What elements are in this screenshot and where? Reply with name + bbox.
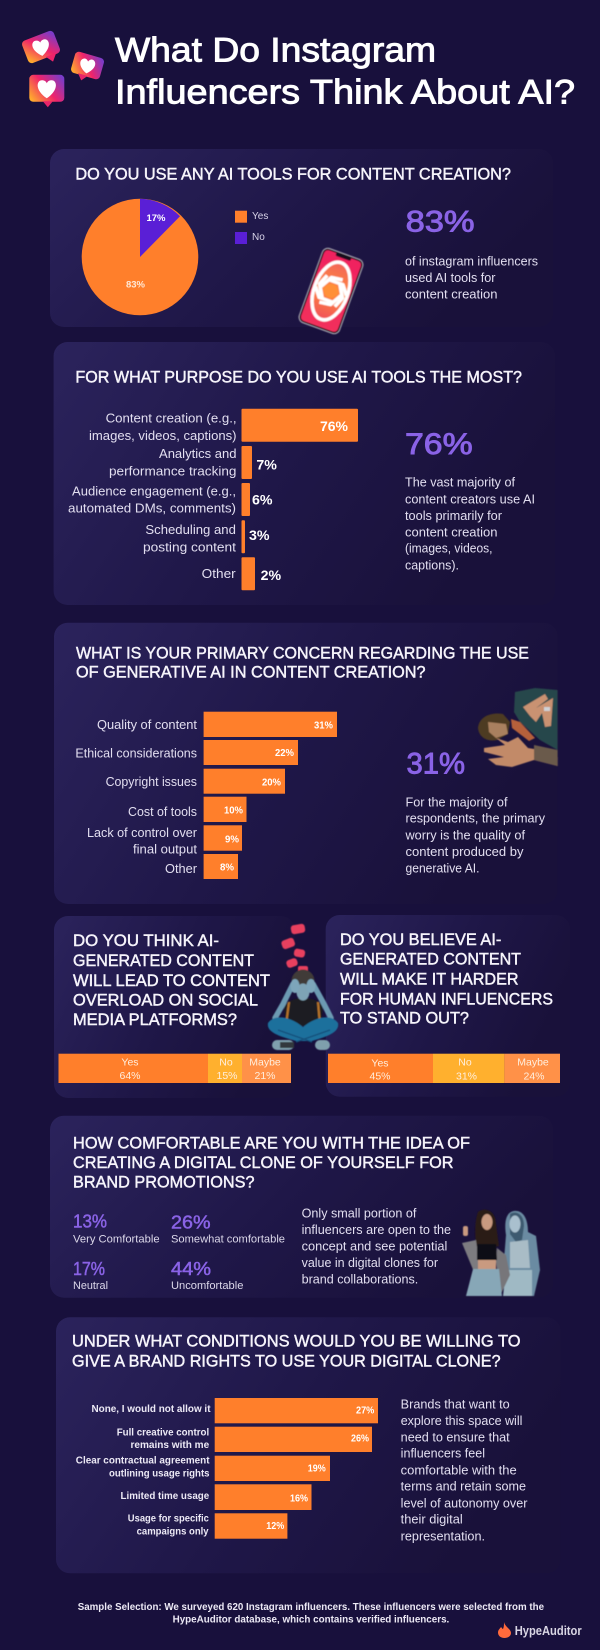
bar chart — [75, 712, 337, 879]
bar chart: Analytics and — [159, 446, 236, 461]
legend: No — [252, 232, 265, 243]
stacked bar: 64% — [119, 1070, 141, 1082]
description: representation. — [401, 1529, 485, 1543]
bar chart: 26% — [351, 1433, 369, 1444]
panel background — [326, 915, 570, 1097]
title: What Do Instagram — [115, 32, 436, 70]
description: tools primarily for — [405, 509, 502, 523]
bar chart: 10% — [224, 806, 243, 817]
heading: FOR HUMAN INFLUENCERS — [340, 990, 553, 1008]
bar chart — [68, 409, 358, 590]
description: generative AI. — [406, 861, 480, 875]
description: worry is the quality of — [404, 828, 526, 842]
icon: heart bubble right — [69, 51, 105, 85]
heading: FOR WHAT PURPOSE DO YOU USE AI TOOLS THE MOST? — [75, 369, 522, 387]
description: content creation — [405, 525, 498, 539]
stacked bar: 31% — [456, 1070, 477, 1082]
stat: uncomfortable: Uncomfortable — [171, 1280, 243, 1292]
panel: conditions for digital clone rights — [56, 1317, 561, 1573]
bar chart: Cost of tools — [128, 804, 197, 819]
panel background — [50, 1116, 553, 1298]
bar chart: automated DMs, comments) — [68, 501, 236, 516]
panel: purpose of AI tools — [54, 342, 555, 605]
stacked bar: 24% — [523, 1070, 545, 1082]
description: content creators use AI — [405, 492, 535, 506]
heading: BRAND PROMOTIONS? — [73, 1173, 254, 1191]
stat: neutral: 17% — [73, 1258, 105, 1279]
stat: very comfortable: 13% — [73, 1210, 107, 1231]
heading: OF GENERATIVE AI IN CONTENT CREATION? — [76, 664, 426, 682]
icon: phone with AI logo — [297, 247, 365, 335]
description: value in digital clones for — [302, 1256, 438, 1270]
bar chart: performance tracking — [109, 464, 236, 479]
heading: OVERLOAD ON SOCIAL — [73, 992, 258, 1010]
legend: Yes — [252, 211, 268, 222]
bar chart: 6% — [252, 492, 273, 508]
bar chart: remains with me — [130, 1439, 209, 1451]
heading: GIVE A BRAND RIGHTS TO USE YOUR DIGITAL CLONE? — [72, 1353, 501, 1371]
footnote: sample selection: HypeAuditor database, which contains verified influencers. — [173, 1614, 449, 1626]
bar chart: Other — [202, 566, 236, 581]
bar chart — [76, 1398, 378, 1539]
bar chart: None, I would not allow it — [92, 1403, 211, 1415]
key stat: 76% — [405, 428, 473, 461]
description: explore this space will — [401, 1414, 522, 1428]
heading: TO STAND OUT? — [340, 1010, 469, 1028]
bar chart: Audience engagement (e.g., — [72, 484, 236, 499]
bar chart: 22% — [275, 748, 294, 759]
description: Brands that want to — [401, 1397, 510, 1411]
heading: HOW COMFORTABLE ARE YOU WITH THE IDEA OF — [73, 1134, 470, 1152]
panel background — [54, 342, 555, 605]
pie chart: 83% — [126, 280, 146, 290]
bar chart: 31% — [314, 720, 333, 731]
stacked bar: Maybe — [249, 1057, 281, 1069]
heading: MEDIA PLATFORMS? — [73, 1011, 237, 1029]
panel background — [50, 149, 553, 327]
stat: uncomfortable — [171, 1258, 243, 1292]
stat: very comfortable — [73, 1210, 160, 1246]
description: (images, videos, — [405, 542, 492, 556]
pie chart: 17% — [146, 213, 166, 224]
bar chart: Limited time usage — [120, 1490, 209, 1502]
key stat: 31% — [406, 747, 465, 780]
bar chart: 9% — [225, 835, 239, 846]
bar chart: 16% — [290, 1493, 308, 1504]
icon: heart notification bubbles — [21, 30, 105, 107]
description: level of autonomy over — [401, 1496, 527, 1510]
image: man with hands — [478, 688, 558, 767]
description: Only small portion of — [302, 1207, 417, 1221]
bar chart: Usage for specific — [128, 1513, 209, 1525]
stat: somewhat comfortable — [171, 1211, 285, 1246]
description: terms and retain some — [401, 1480, 526, 1494]
key stat: 83% — [406, 206, 475, 239]
description: concept and see potential — [302, 1240, 447, 1254]
bar chart: Scheduling and — [145, 522, 236, 537]
stacked bar — [328, 1054, 560, 1083]
bar chart: Lack of control over — [87, 825, 198, 840]
bar chart: 8% — [220, 863, 234, 874]
heading: GENERATED CONTENT — [340, 951, 521, 969]
bar chart: Quality of content — [97, 717, 197, 732]
heading: DO YOU USE ANY AI TOOLS FOR CONTENT CREATION? — [75, 165, 511, 183]
heading: CREATING A DIGITAL CLONE OF YOURSELF FOR — [73, 1154, 454, 1172]
panel background — [54, 916, 295, 1098]
stacked bar — [58, 1054, 291, 1083]
description: brand collaborations. — [302, 1273, 418, 1287]
description: content produced by — [406, 845, 524, 859]
bar chart: 27% — [356, 1406, 374, 1417]
panel: standing out question — [326, 915, 570, 1097]
stacked bar: 45% — [369, 1071, 391, 1083]
panel background — [54, 623, 558, 904]
icon: flame — [498, 1622, 511, 1638]
panel: primary concern — [54, 623, 558, 904]
stacked bar: Yes — [371, 1057, 389, 1069]
heading: WHAT IS YOUR PRIMARY CONCERN REGARDING THE USE — [76, 644, 529, 662]
description: of instagram influencers — [405, 255, 538, 269]
stacked bar: Yes — [121, 1057, 139, 1069]
bar chart: posting content — [143, 539, 236, 554]
bar chart: Copyright issues — [106, 774, 197, 789]
bar chart: 76% — [320, 418, 349, 434]
heading: UNDER WHAT CONDITIONS WOULD YOU BE WILLING TO — [72, 1333, 521, 1351]
description: content creation — [405, 287, 498, 301]
stat: somewhat comfortable: Somewhat comfortable — [171, 1234, 285, 1246]
panel background — [56, 1317, 561, 1573]
bar chart: 3% — [249, 527, 270, 543]
bar chart: 7% — [256, 456, 277, 472]
stacked bar: 21% — [254, 1070, 276, 1082]
stat: very comfortable: Very Comfortable — [73, 1234, 160, 1246]
logo: HypeAuditor: HypeAuditor — [515, 1623, 582, 1638]
stacked bar: No — [458, 1057, 472, 1069]
description: For the majority of — [406, 795, 508, 809]
description: influencers feel — [401, 1447, 485, 1461]
bar chart: outlining usage rights — [109, 1468, 210, 1480]
description: their digital — [401, 1513, 463, 1527]
bar chart: campaigns only — [137, 1526, 209, 1538]
bar chart: Clear contractual agreement — [76, 1455, 210, 1467]
description: need to ensure that — [401, 1430, 510, 1444]
panel: digital clone comfort — [50, 1116, 553, 1298]
stat: neutral: Neutral — [73, 1280, 108, 1292]
description: influencers are open to the — [302, 1223, 451, 1237]
bar chart: 20% — [262, 777, 281, 788]
image: woman and digital clone — [462, 1210, 540, 1296]
bar chart: images, videos, captions) — [89, 428, 236, 443]
stacked bar: Maybe — [517, 1057, 549, 1069]
stacked bar: No — [219, 1057, 233, 1069]
image: overwhelmed person with notifications — [268, 923, 338, 1050]
bar chart: Full creative control — [117, 1426, 209, 1438]
heading: WILL MAKE IT HARDER — [340, 971, 519, 989]
bar chart: Ethical considerations — [75, 746, 197, 761]
bar chart: final output — [133, 842, 197, 857]
description: used AI tools for — [405, 271, 496, 285]
description: respondents, the primary — [406, 812, 546, 826]
bar chart: Content creation (e.g., — [106, 411, 237, 426]
title: Influencers Think About AI? — [115, 73, 575, 111]
icon: heart bubble bottom — [29, 75, 64, 107]
heading: DO YOU BELIEVE AI- — [340, 931, 501, 949]
pie chart — [82, 199, 198, 315]
bar chart: 19% — [308, 1463, 326, 1474]
stat: somewhat comfortable: 26% — [171, 1211, 210, 1232]
description: captions). — [405, 558, 459, 572]
bar chart: Other — [165, 861, 198, 876]
panel: content overload question — [54, 916, 295, 1098]
bar chart: 2% — [261, 567, 282, 583]
stat: uncomfortable: 44% — [171, 1258, 211, 1279]
stat: neutral — [73, 1258, 108, 1292]
bar chart: 12% — [266, 1521, 284, 1532]
icon: heart bubble top left — [21, 30, 63, 70]
description: comfortable with the — [401, 1463, 517, 1477]
stacked bar: 15% — [216, 1070, 238, 1082]
description: The vast majority of — [405, 476, 516, 490]
heading: WILL LEAD TO CONTENT — [73, 972, 270, 990]
heading: DO YOU THINK AI- — [73, 932, 219, 950]
legend — [235, 211, 268, 244]
panel: AI tools usage — [50, 149, 553, 335]
heading: GENERATED CONTENT — [73, 952, 254, 970]
footnote: sample selection: Sample Selection: We surveyed 620 Instagram influencers. These influencers were selected from the — [78, 1601, 544, 1613]
logo: HypeAuditor — [498, 1622, 582, 1638]
